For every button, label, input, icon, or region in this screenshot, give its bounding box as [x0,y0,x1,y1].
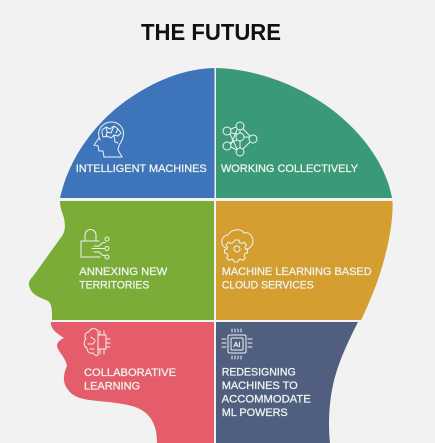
label: INTELLIGENT MACHINES [76,163,207,175]
panel: collaborative learning: LEARNING [84,380,140,392]
panel: annexing new territories [29,201,214,320]
label: WORKING COLLECTIVELY [221,163,359,175]
panel: machine learning based cloud services: CLOUD SERVICES [222,280,314,292]
red chin segment [51,322,214,443]
icon: cloud with gear [222,230,253,262]
label: ANNEXING NEW [79,266,168,278]
icon: network nodes [223,122,257,156]
panel: intelligent machines [60,68,214,198]
panel: redesigning machines: ACCOMMODATE [222,394,311,406]
panel: collaborative learning [51,322,214,443]
panel: working collectively [216,68,392,198]
panel: redesigning machines [216,322,358,443]
title: THE FUTURE [141,19,281,45]
label: MACHINE LEARNING BASED [222,266,372,278]
label: REDESIGNING [222,366,296,378]
panel: annexing new territories: TERRITORIES [79,280,149,292]
icon: brain with chip [84,329,110,356]
icon: lock with circuit [81,230,109,259]
icon: head with brain [94,122,123,157]
slate neck segment [216,322,358,443]
blue head segment [60,68,214,198]
icon: AI chip [222,329,252,359]
green head segment [216,68,392,198]
panel: redesigning machines: MACHINES TO [222,380,298,392]
panel: machine learning based cloud services [216,201,393,320]
chip label: AI [234,342,241,349]
orange head segment [216,201,393,320]
label: COLLABORATIVE [84,367,176,379]
green face segment [29,201,214,320]
panel: redesigning machines: ML POWERS [222,407,288,419]
